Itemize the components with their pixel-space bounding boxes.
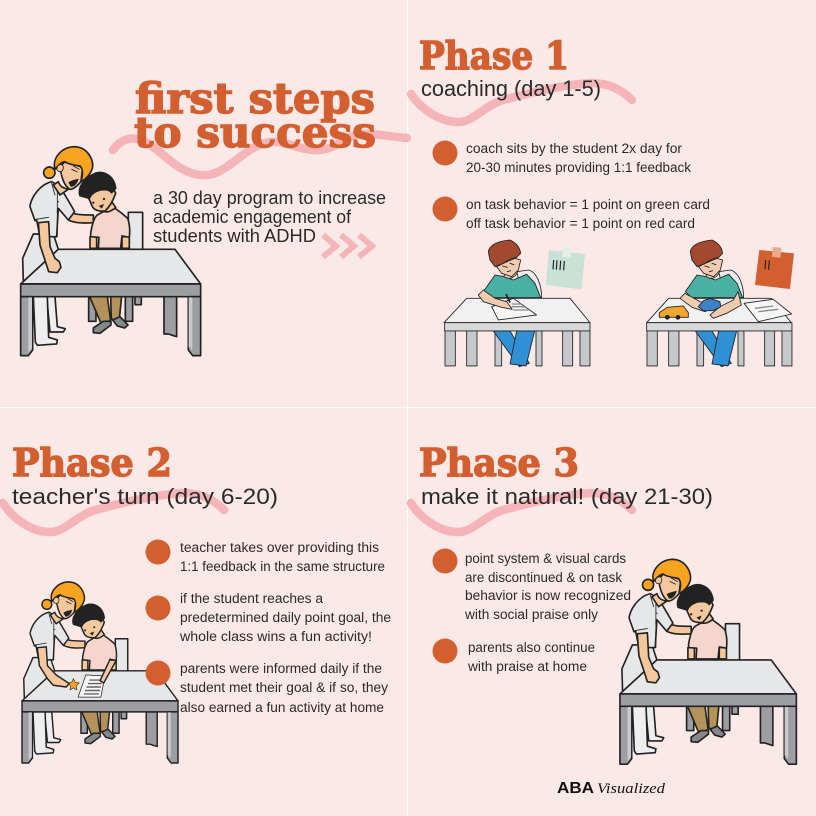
illustration: student on task with green card bbox=[444, 240, 590, 367]
intro text: a 30 day program to increase bbox=[153, 188, 386, 208]
bullet: praise: behavior is now recognized bbox=[465, 588, 631, 603]
bullet: points: off task behavior = 1 point on red card bbox=[466, 216, 695, 231]
bullet: praise: with social praise only bbox=[464, 607, 598, 622]
bullet: coach: coach sits by the student 2x day for bbox=[466, 141, 683, 156]
intro text: students with ADHD bbox=[153, 226, 316, 246]
student writing arm bbox=[100, 660, 116, 683]
bullet: parents informed: student met their goal & if so, they bbox=[180, 680, 388, 695]
green card bbox=[546, 247, 585, 289]
illustration: teacher and student at table bbox=[21, 147, 201, 356]
bullet: praise: are discontinued & on task bbox=[465, 570, 622, 585]
bullet: praise: point system & visual cards bbox=[465, 551, 626, 566]
heading: phase 2: Phase 2 bbox=[12, 440, 172, 485]
bullet: parents: parents also continue bbox=[468, 640, 595, 655]
decorative wave bbox=[411, 493, 632, 532]
bullet: teacher takes over: teacher takes over providing this bbox=[180, 540, 379, 555]
intro text bbox=[153, 188, 386, 246]
logo: ABA bbox=[557, 780, 594, 797]
subheading: coaching (day 1-5) bbox=[421, 76, 601, 101]
bullet: teacher takes over: 1:1 feedback in the same structure bbox=[180, 559, 385, 574]
heading: phase 3: Phase 3 bbox=[419, 440, 579, 485]
bullet: parents informed bbox=[146, 660, 388, 715]
bullet: parents: with praise at home bbox=[467, 659, 587, 674]
bullet: class goal: whole class wins a fun activity! bbox=[179, 629, 372, 644]
toy cars bbox=[659, 298, 721, 320]
teacher pointing arm bbox=[37, 647, 69, 687]
bullet: class goal: if the student reaches a bbox=[180, 591, 323, 606]
intro text: academic engagement of bbox=[153, 207, 352, 227]
icon: chevron arrows bbox=[323, 235, 372, 257]
subheading: make it natural! (day 21-30) bbox=[421, 484, 713, 509]
subheading: teacher's turn (day 6-20) bbox=[12, 484, 278, 509]
logo bbox=[557, 780, 666, 797]
worksheet bbox=[78, 675, 105, 697]
panel: phase 1 bbox=[411, 33, 794, 367]
bullet: parents informed: also earned a fun activity at home bbox=[180, 700, 384, 715]
illustration: student off task with red card bbox=[647, 240, 794, 367]
title: first steps bbox=[135, 74, 375, 123]
bullet: parents bbox=[432, 638, 595, 674]
decorative wave bbox=[3, 493, 224, 532]
title: to success bbox=[134, 108, 376, 157]
bullet: points: on task behavior = 1 point on green card bbox=[466, 197, 710, 212]
bullet: coach: 20-30 minutes providing 1:1 feedback bbox=[466, 160, 691, 175]
bullet: teacher takes over bbox=[146, 540, 385, 574]
panel: phase 3 bbox=[411, 440, 796, 797]
panel: phase 2 bbox=[3, 440, 391, 763]
panel: intro bbox=[21, 74, 407, 356]
bullet: class goal bbox=[146, 591, 391, 644]
illustration: teacher and student at table bbox=[620, 559, 796, 764]
heading: phase 1: Phase 1 bbox=[419, 33, 569, 78]
illustration: teacher giving star to student bbox=[22, 582, 178, 763]
decorative wave bbox=[411, 83, 632, 122]
decorative wave behind title bbox=[113, 134, 407, 175]
paper bbox=[744, 299, 792, 322]
bullet: points bbox=[432, 196, 710, 231]
bullet: parents informed: parents were informed daily if the bbox=[180, 661, 382, 676]
bullet: coach bbox=[432, 140, 691, 175]
bullet: class goal: predetermined daily point goal, the bbox=[180, 610, 391, 625]
title bbox=[134, 74, 376, 157]
star bbox=[68, 679, 79, 690]
logo: Visualized bbox=[597, 781, 666, 797]
red card bbox=[755, 247, 794, 289]
bullet: praise bbox=[432, 548, 631, 622]
